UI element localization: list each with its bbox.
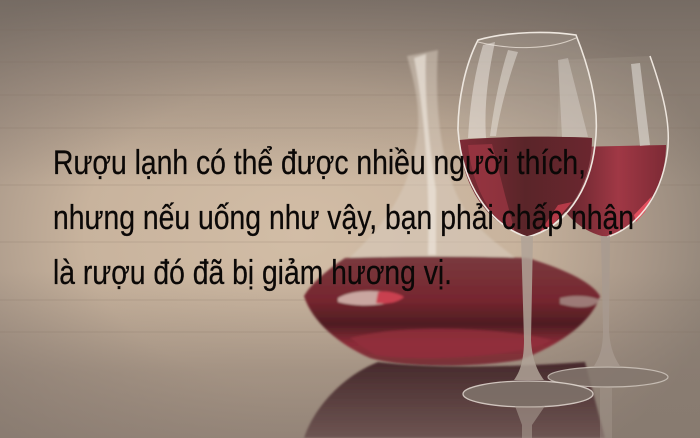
decanter wine [304, 256, 600, 366]
wine [560, 145, 666, 237]
wine highlight [338, 291, 402, 305]
glass bowl [555, 56, 668, 237]
rim and edges [458, 32, 596, 237]
quote text [53, 144, 634, 292]
base reflection [515, 406, 545, 438]
decanter glass neck [345, 50, 520, 262]
wine highlights [468, 144, 515, 232]
line 1: Rượu lạnh có thể được nhiều người thích, [53, 144, 586, 182]
neck highlights [414, 54, 436, 255]
glass bowl [458, 32, 596, 237]
rim and highlights [607, 56, 668, 237]
glass highlights [468, 42, 495, 138]
base [548, 367, 668, 387]
stem [514, 236, 544, 380]
front wine glass [458, 32, 612, 438]
line 3: là rượu đó đã bị giảm hương vị. [53, 254, 452, 292]
decanter [304, 50, 600, 366]
stem [594, 236, 620, 366]
back wine glass [548, 56, 668, 387]
decanter reflection [304, 362, 605, 438]
wine reflection [634, 196, 652, 222]
base [463, 381, 593, 407]
wine [459, 137, 592, 237]
